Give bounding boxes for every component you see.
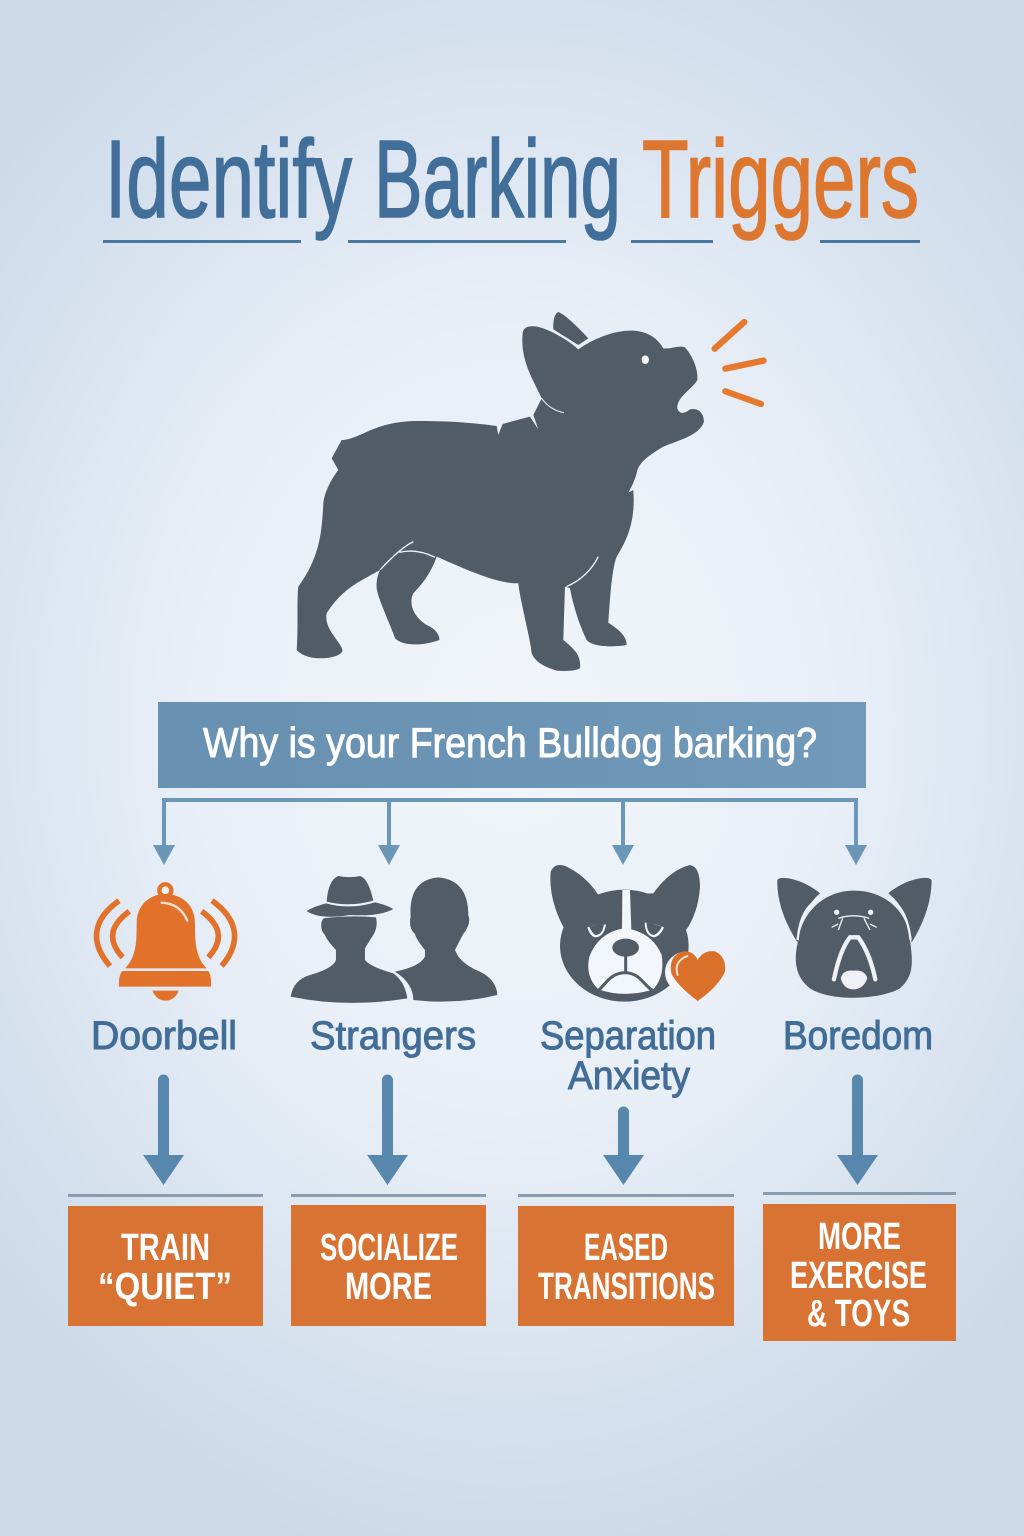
icon: strangers [291, 876, 497, 1003]
solution: more exercise and toys: MORE [818, 1216, 901, 1258]
icon: sad dog with heart [550, 865, 725, 1002]
solution: train quiet: TRAIN [121, 1227, 210, 1269]
solution: eased transitions: EASED [584, 1227, 668, 1269]
label: Strangers: Strangers [310, 1014, 476, 1058]
arrow: boredom [837, 1074, 878, 1185]
solution: more exercise and toys: & TOYS [807, 1293, 910, 1335]
solutions [68, 1192, 956, 1341]
banner: question: Why is your French Bulldog barking? [203, 719, 817, 766]
title [105, 118, 919, 241]
label: Separation Anxiety: Separation [540, 1014, 716, 1058]
down arrows [143, 1074, 878, 1185]
solution: train quiet [68, 1194, 263, 1326]
label: Separation Anxiety: Anxiety [568, 1054, 690, 1098]
title word: Barking: Barking [374, 118, 621, 241]
arrow: doorbell [143, 1074, 184, 1185]
solution: eased transitions: TRANSITIONS [538, 1266, 715, 1308]
icon: bored dog [777, 878, 932, 998]
connector tree [153, 798, 867, 865]
solution: socialize more [291, 1194, 486, 1326]
trigger labels [91, 1014, 933, 1098]
solution: more exercise and toys [763, 1192, 956, 1341]
solution: socialize more: MORE [345, 1266, 432, 1308]
title word: Identify: Identify [105, 118, 352, 241]
label: Boredom: Boredom [783, 1014, 933, 1058]
solution: train quiet: “QUIET” [98, 1266, 232, 1308]
icon: doorbell [97, 884, 235, 1001]
solution: more exercise and toys: EXERCISE [790, 1255, 927, 1297]
icon: barking French Bulldog silhouette [297, 312, 764, 671]
arrow: separation anxiety [603, 1106, 644, 1185]
banner: question [158, 702, 866, 788]
solution: eased transitions [518, 1194, 734, 1326]
solution: socialize more: SOCIALIZE [320, 1227, 458, 1269]
label: Doorbell: Doorbell [91, 1014, 237, 1058]
arrow: strangers [367, 1074, 408, 1185]
label: Separation Anxiety [540, 1014, 716, 1098]
